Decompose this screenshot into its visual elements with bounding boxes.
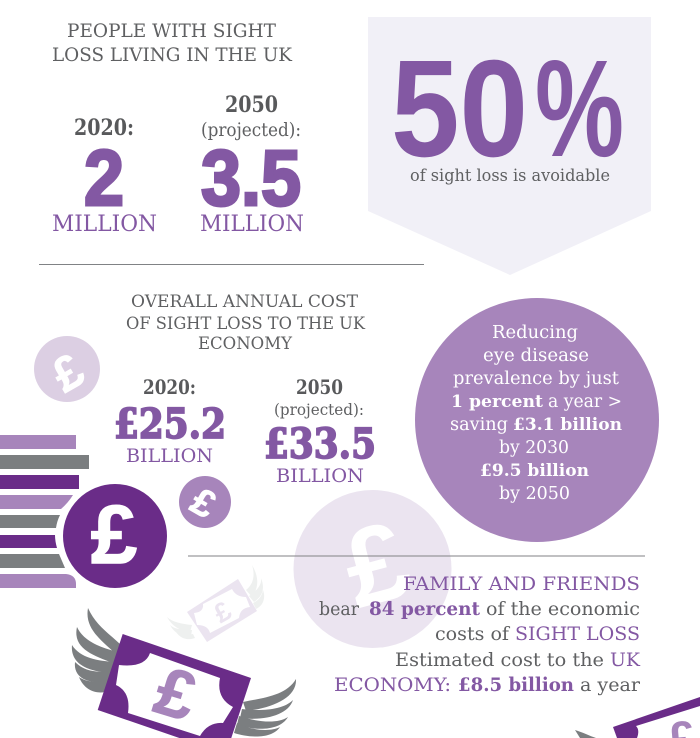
heading: overall annual cost: OF SIGHT LOSS TO THE UK xyxy=(126,314,366,333)
icon: large pale coin: £ xyxy=(331,497,422,632)
big figure: 50% xyxy=(391,32,624,186)
stat: 2050 projected 3.5 million: 3.5 xyxy=(201,133,301,222)
text block: family and friends: SIGHT LOSS xyxy=(515,623,640,645)
stat: 2050 projected 3.5 million: MILLION xyxy=(200,211,304,237)
text block: family and friends: £8.5 billion xyxy=(458,674,574,696)
text block: family and friends: FAMILY AND FRIENDS xyxy=(403,573,640,595)
panel: reducing eye disease circle xyxy=(415,298,659,542)
icon: medium coin xyxy=(179,476,231,528)
stat: 2020 two million: MILLION xyxy=(52,211,157,237)
text block: family and friends: UK xyxy=(610,649,641,671)
text block: family and friends xyxy=(319,573,641,696)
stat: 2050 projected cost xyxy=(264,375,376,487)
heading: overall annual cost: OVERALL ANNUAL COST xyxy=(131,292,358,311)
note body xyxy=(98,634,251,738)
big figure: 50%: % xyxy=(535,32,624,186)
left wing xyxy=(72,608,122,692)
panel: reducing eye disease circle: a year > xyxy=(548,392,622,412)
panel: reducing eye disease circle: eye disease xyxy=(483,346,589,366)
heading: people with sight loss xyxy=(52,20,293,66)
stat: 2020 cost xyxy=(114,375,226,467)
icon: large dark coin: £ xyxy=(91,488,137,581)
text block: family and friends: 84 percent xyxy=(369,598,480,620)
stat: 2020 cost: BILLION xyxy=(126,445,213,467)
icon: pale coin top left: £ xyxy=(43,344,93,403)
stat: 2050 projected cost: BILLION xyxy=(276,465,364,487)
stat: 2050 projected 3.5 million: 2050 xyxy=(225,92,278,118)
text block: family and friends: of the economic xyxy=(486,598,640,620)
note window xyxy=(116,653,233,736)
panel: reducing eye disease circle: by 2050 xyxy=(499,484,570,504)
icon: large dark coin xyxy=(63,484,167,588)
icon: banknote bottom right xyxy=(575,697,700,738)
caption: of sight loss is avoidable: of sight loss is avoidable xyxy=(410,166,610,185)
big figure: 50%: 50 xyxy=(391,32,528,186)
icon: winged banknote xyxy=(72,608,296,738)
pound sign: £ xyxy=(147,652,205,736)
panel: reducing eye disease circle: £3.1 billion xyxy=(513,415,622,435)
icon: pale coin top left xyxy=(34,336,100,403)
icon: faded flying banknote xyxy=(167,565,264,642)
icon: large pale coin xyxy=(294,490,452,648)
panel: 50 percent avoidable xyxy=(368,17,651,275)
icon: stack of coins xyxy=(0,435,89,588)
icon: medium coin: £ xyxy=(183,480,223,527)
text block: family and friends: costs of xyxy=(435,623,511,645)
stat: 2020 two million xyxy=(52,115,157,237)
panel: reducing eye disease circle: prevalence by just xyxy=(453,369,619,389)
text block: family and friends: bear xyxy=(319,598,360,620)
panel: reducing eye disease circle: saving xyxy=(450,415,508,435)
stat: 2020 cost: £25.2 xyxy=(114,400,226,448)
stat: 2020 two million: 2 xyxy=(84,133,124,222)
stat: 2020 two million: 2020: xyxy=(74,115,134,141)
heading: overall annual cost xyxy=(126,292,366,353)
text block: family and friends: a year xyxy=(580,674,641,696)
stat: 2020 cost: 2020: xyxy=(143,375,196,399)
heading: overall annual cost: ECONOMY xyxy=(198,334,293,353)
heading: people with sight loss: LOSS LIVING IN THE UK xyxy=(52,44,293,66)
panel: reducing eye disease circle: by 2030 xyxy=(499,438,569,458)
panel: reducing eye disease circle: £9.5 billion xyxy=(480,461,589,481)
stat: 2050 projected 3.5 million xyxy=(200,92,304,237)
text block: family and friends: Estimated cost to the xyxy=(395,649,604,671)
heading: people with sight loss: PEOPLE WITH SIGHT xyxy=(67,20,276,42)
icon: faded flying banknote: £ xyxy=(208,595,237,629)
panel: reducing eye disease circle: Reducing xyxy=(492,323,578,343)
stat: 2050 projected cost: (projected): xyxy=(274,400,364,419)
stat: 2050 projected cost: 2050 xyxy=(296,375,343,399)
stat: 2050 projected cost: £33.5 xyxy=(264,420,376,468)
panel: reducing eye disease circle: 1 percent xyxy=(451,392,543,412)
stat: 2050 projected 3.5 million: (projected): xyxy=(201,120,301,141)
right wing xyxy=(234,679,296,737)
text block: family and friends: ECONOMY: xyxy=(334,674,451,696)
